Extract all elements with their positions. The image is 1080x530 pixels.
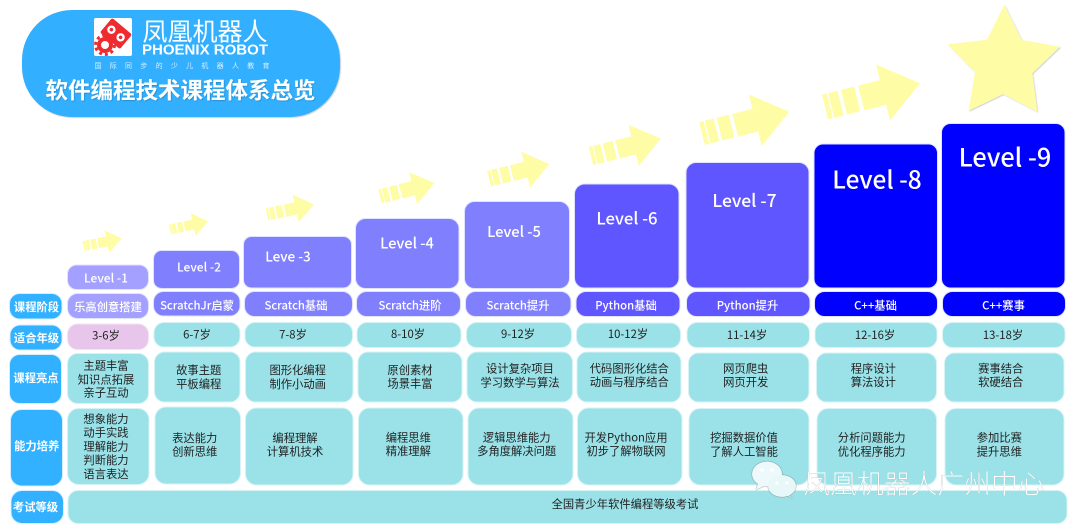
level 9 block [942, 124, 1065, 288]
ability 6: 初步了解物联网 [586, 443, 666, 459]
brand name english: PHOENIX ROBOT [142, 42, 268, 58]
ability 3: 编程理解 [272, 430, 318, 446]
ability 8 [817, 408, 936, 485]
ability 1: 想象能力 [83, 411, 129, 427]
icon: phoenix robot logo [94, 18, 132, 56]
age 7 [687, 322, 810, 348]
ability 2 [155, 407, 240, 484]
stage 8 [814, 292, 938, 316]
ability 9: 提升思维 [977, 444, 1022, 460]
age 1 [68, 324, 148, 350]
highlight 9: 赛事结合 [978, 361, 1023, 377]
highlight 2 [154, 352, 240, 402]
age 1: 3-6岁 [92, 328, 120, 344]
highlight 5: 设计复杂项目 [486, 361, 554, 377]
ability 2: 创新思维 [172, 444, 217, 460]
highlight 7 [688, 353, 809, 402]
stage 1 [68, 294, 148, 318]
level 1 block: Level -1 [84, 270, 128, 286]
age 7: 11-14岁 [727, 327, 767, 343]
level 9 block: Level -9 [959, 138, 1051, 174]
title: 软件编程技术课程体系总览 [45, 74, 316, 106]
age 6: 10-12岁 [608, 326, 648, 342]
highlight 4 [358, 352, 462, 402]
stage 2: ScratchJr启蒙 [160, 298, 234, 314]
watermark [752, 462, 1045, 502]
level 3 block: Leve -3 [265, 246, 311, 266]
row: course highlights [10, 352, 1064, 404]
highlight 4: 场景丰富 [387, 375, 433, 391]
label: abilities [10, 410, 62, 486]
highlight 6: 动画与程序结合 [590, 374, 669, 390]
ability 5: 逻辑思维能力 [483, 430, 551, 446]
label: highlights [10, 354, 62, 404]
ability 9: 参加比赛 [977, 430, 1022, 446]
age 9 [942, 322, 1065, 348]
level 8 block: Level -8 [832, 162, 922, 196]
age 8: 12-16岁 [855, 327, 895, 343]
level 6 block: Level -6 [596, 206, 658, 230]
age 5 [466, 322, 572, 348]
arrow 7 [696, 86, 796, 159]
highlight 2: 平板编程 [176, 376, 221, 392]
ability 1: 判断能力 [83, 452, 129, 468]
ability 1: 语言表达 [83, 466, 129, 482]
highlight 1: 主题丰富 [83, 358, 129, 374]
level 7 block [686, 162, 809, 288]
level 2 block: Level -2 [177, 258, 221, 276]
ability 8: 优化程序能力 [838, 444, 906, 460]
ability 4: 编程思维 [386, 430, 431, 446]
age 9: 13-18岁 [983, 327, 1023, 343]
ability 2: 表达能力 [172, 430, 217, 446]
highlight 7: 网页开发 [723, 374, 768, 390]
ability 1 [68, 408, 149, 484]
ability 7: 挖掘数据价值 [710, 430, 778, 446]
highlight 3: 图形化编程 [269, 362, 326, 378]
stage 9 [942, 292, 1066, 316]
ability 6: 开发Python应用 [584, 430, 668, 446]
icon: wechat [752, 462, 796, 499]
highlight 6: 代码图形化结合 [590, 361, 669, 377]
arrows: level progression [81, 55, 927, 257]
label: abilities: 能力培养 [14, 438, 59, 454]
stage 3: Scratch基础 [264, 298, 328, 314]
highlight 2: 故事主题 [176, 362, 221, 378]
ability 7: 了解人工智能 [710, 444, 778, 460]
highlight 8: 算法设计 [851, 374, 896, 390]
level 5 block: Level -5 [487, 221, 541, 242]
icon: star [948, 5, 1060, 112]
label: course stage [10, 294, 62, 319]
label: exam level [11, 490, 64, 524]
age 2: 6-7岁 [183, 326, 211, 342]
level 7 block: Level -7 [712, 188, 777, 213]
exam description [68, 490, 1067, 524]
ability 7 [689, 408, 809, 485]
ability 5 [468, 408, 573, 485]
row: suitable age [10, 322, 1065, 350]
brand name: 凤凰机器人 [142, 12, 268, 48]
ability 4 [358, 408, 463, 485]
highlight 8: 程序设计 [851, 361, 896, 377]
arrow 1 [81, 227, 124, 257]
ability 1: 理解能力 [83, 438, 129, 454]
ability 6 [578, 408, 682, 485]
stage 9: C++赛事 [982, 298, 1025, 314]
highlight 1: 亲子互动 [83, 385, 129, 401]
highlight 8 [816, 353, 936, 402]
arrow 6 [586, 118, 666, 177]
level 2 block [154, 250, 240, 288]
highlight 4: 原创素材 [387, 362, 433, 378]
row: abilities [10, 407, 1064, 486]
highlight 3: 制作小动画 [269, 376, 326, 392]
level 6 block [574, 184, 679, 288]
stage 4: Scratch进阶 [378, 298, 442, 314]
label: highlights: 课程亮点 [13, 370, 59, 386]
highlight 1: 知识点拓展 [78, 371, 134, 387]
age 8 [815, 322, 937, 348]
stage 4 [356, 292, 460, 316]
exam description: 全国青少年软件编程等级考试 [552, 496, 698, 512]
label: suitable age [10, 325, 62, 350]
stage 5: Scratch提升 [486, 298, 550, 314]
ability 8: 分析问题能力 [838, 430, 906, 446]
tagline: 国际同步的少儿机器人教育 [94, 61, 270, 71]
ability 4: 精准理解 [386, 443, 431, 459]
level 4 block: Level -4 [380, 232, 434, 254]
stage 6: Python基础 [595, 298, 657, 314]
age 2 [154, 322, 240, 347]
highlight 5: 学习数学与算法 [480, 374, 560, 390]
age 3 [245, 322, 352, 347]
arrow 8 [818, 55, 927, 135]
level 5 block [464, 202, 570, 288]
level staircase [68, 124, 1065, 290]
highlight 5 [467, 352, 572, 402]
stage 3 [244, 292, 352, 316]
arrow 5 [485, 146, 554, 196]
label: course stage: 课程阶段 [14, 299, 59, 315]
arrow 3 [264, 191, 317, 228]
header panel [22, 10, 340, 117]
stage 6 [576, 292, 680, 316]
age 4 [357, 322, 461, 348]
label: exam level: 考试等级 [13, 499, 59, 515]
ability 3: 计算机技术 [267, 444, 323, 460]
arrow 4 [376, 167, 438, 213]
label: suitable age: 适合年级 [14, 330, 60, 346]
ability 9 [945, 408, 1064, 485]
arrow 2 [168, 210, 211, 241]
highlight 7: 网页爬虫 [723, 361, 768, 377]
row: course stage [10, 292, 1066, 319]
age 3: 7-8岁 [279, 326, 307, 342]
age 5: 9-12岁 [501, 326, 535, 342]
level 3 block [244, 236, 352, 288]
level 4 block [356, 218, 459, 288]
highlight 6 [577, 352, 681, 402]
age 4: 8-10岁 [391, 326, 425, 342]
stage 7: Python提升 [717, 298, 778, 314]
row: exam level [11, 490, 1067, 524]
stage 2 [154, 292, 240, 316]
ability 5: 多角度解决问题 [477, 443, 556, 459]
ability 3 [246, 408, 353, 485]
stage 5 [466, 292, 571, 316]
level 8 block [814, 144, 938, 288]
highlight 1 [68, 354, 148, 404]
highlight 9 [944, 353, 1064, 402]
age 6 [576, 323, 680, 348]
watermark text: 凤凰机器人广州中心 [803, 462, 1045, 502]
level 1 block [68, 265, 148, 290]
stage 1: 乐高创意搭建 [74, 299, 142, 315]
stage 8: C++基础 [854, 298, 897, 314]
stage 7 [686, 292, 810, 316]
highlight 3 [246, 352, 353, 402]
ability 1: 动手实践 [83, 425, 129, 441]
highlight 9: 软硬结合 [978, 374, 1023, 390]
